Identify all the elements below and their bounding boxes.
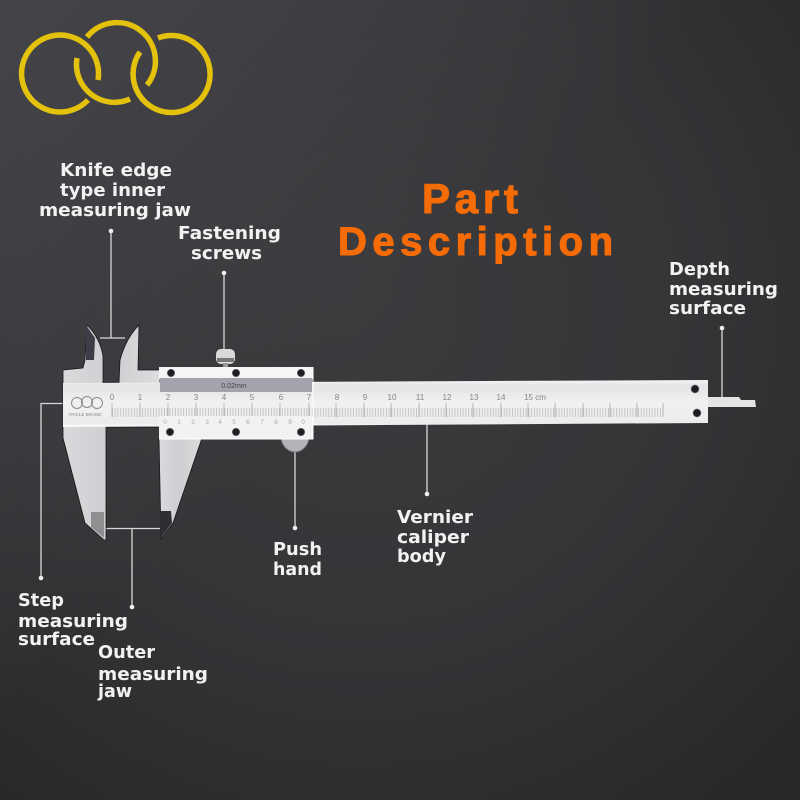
main scale numbers: 6 <box>279 393 284 402</box>
label: step measuring surface <box>18 591 128 650</box>
label: vernier caliper body <box>397 508 473 567</box>
moving jaw dark facet <box>160 511 172 538</box>
main scale numbers: 10 <box>388 393 397 402</box>
main scale numbers <box>110 393 546 402</box>
main scale numbers: 14 <box>497 393 506 402</box>
vernier scale numbers: 4 <box>218 419 222 426</box>
vernier scale numbers: 2 <box>191 419 195 426</box>
main scale numbers: 12 <box>443 393 452 402</box>
vernier scale numbers: 0 <box>163 419 167 426</box>
push hand wheel <box>281 438 309 452</box>
main scale numbers: 2 <box>166 393 171 402</box>
label: depth measuring surface: Depth <box>669 260 730 280</box>
main scale numbers: 0 <box>110 393 115 402</box>
knife edge dark facet <box>86 325 95 360</box>
title: Description <box>338 220 613 264</box>
depth rod <box>706 397 756 407</box>
vernier scale numbers: 1 <box>177 419 181 426</box>
leader lines <box>41 231 722 607</box>
brand mark on caliper: TRICLE BRAND <box>68 412 102 417</box>
label: push hand <box>273 540 322 580</box>
logo: three interlocking yellow rings <box>22 23 210 113</box>
main scale numbers: 13 <box>470 393 479 402</box>
main scale numbers: 7 <box>307 393 312 402</box>
vernier slider <box>159 367 313 439</box>
vernier scale numbers: 8 <box>274 419 278 426</box>
main scale numbers: 1 <box>138 393 143 402</box>
outer jaw step facet <box>91 512 104 538</box>
vernier scale numbers: 3 <box>205 419 209 426</box>
main scale numbers: 3 <box>194 393 199 402</box>
label: step measuring surface: Step <box>18 591 64 611</box>
label: outer measuring jaw: Outer <box>98 643 155 663</box>
label: vernier caliper body: caliper <box>397 528 469 548</box>
label: fastening screws: screws <box>191 244 262 264</box>
vernier slider: 0.02mm <box>221 383 247 390</box>
label: depth measuring surface: surface <box>669 299 746 319</box>
label: depth measuring surface <box>669 260 778 319</box>
label: push hand: Push <box>273 540 322 560</box>
vernier scale numbers: 9 <box>288 419 292 426</box>
main scale numbers: 8 <box>335 393 340 402</box>
title <box>338 175 613 264</box>
main scale ticks <box>112 403 663 417</box>
fastening thumb screw <box>216 349 235 368</box>
label: outer measuring jaw: jaw <box>97 682 132 702</box>
main scale numbers: 15 cm <box>524 393 546 402</box>
label: fastening screws: Fastening <box>178 224 281 244</box>
label: knife edge inner measuring jaw: Knife edge <box>60 161 172 181</box>
label: knife edge inner measuring jaw: measuring jaw <box>39 201 191 221</box>
leader line end dots <box>39 229 724 609</box>
main scale numbers: 5 <box>250 393 255 402</box>
brand mark on caliper <box>68 396 102 417</box>
label: step measuring surface: measuring <box>18 612 128 632</box>
vernier scale numbers: 7 <box>260 419 264 426</box>
fixed jaw head and outer jaw <box>63 325 160 540</box>
main beam <box>63 380 708 427</box>
label: vernier caliper body: Vernier <box>397 508 473 528</box>
label: step measuring surface: surface <box>18 630 95 650</box>
main scale numbers: 4 <box>222 393 227 402</box>
label: outer measuring jaw: measuring <box>98 665 208 685</box>
label: knife edge inner measuring jaw: type inner <box>60 181 165 201</box>
vernier scale numbers: 0 <box>301 419 305 426</box>
label: fastening screws <box>178 224 281 264</box>
main scale numbers: 11 <box>416 393 425 402</box>
vernier caliper <box>63 325 756 540</box>
label: knife edge inner measuring jaw <box>39 161 191 221</box>
screws <box>166 369 701 436</box>
moving jaw <box>159 438 202 539</box>
label: outer measuring jaw <box>97 643 208 702</box>
vernier scale numbers <box>163 419 305 426</box>
vernier scale numbers: 6 <box>246 419 250 426</box>
vernier scale numbers: 5 <box>232 419 236 426</box>
label: depth measuring surface: measuring <box>669 280 778 300</box>
label: push hand: hand <box>273 560 322 580</box>
main scale numbers: 9 <box>363 393 368 402</box>
title: Part <box>422 175 518 222</box>
label: vernier caliper body: body <box>397 547 447 567</box>
